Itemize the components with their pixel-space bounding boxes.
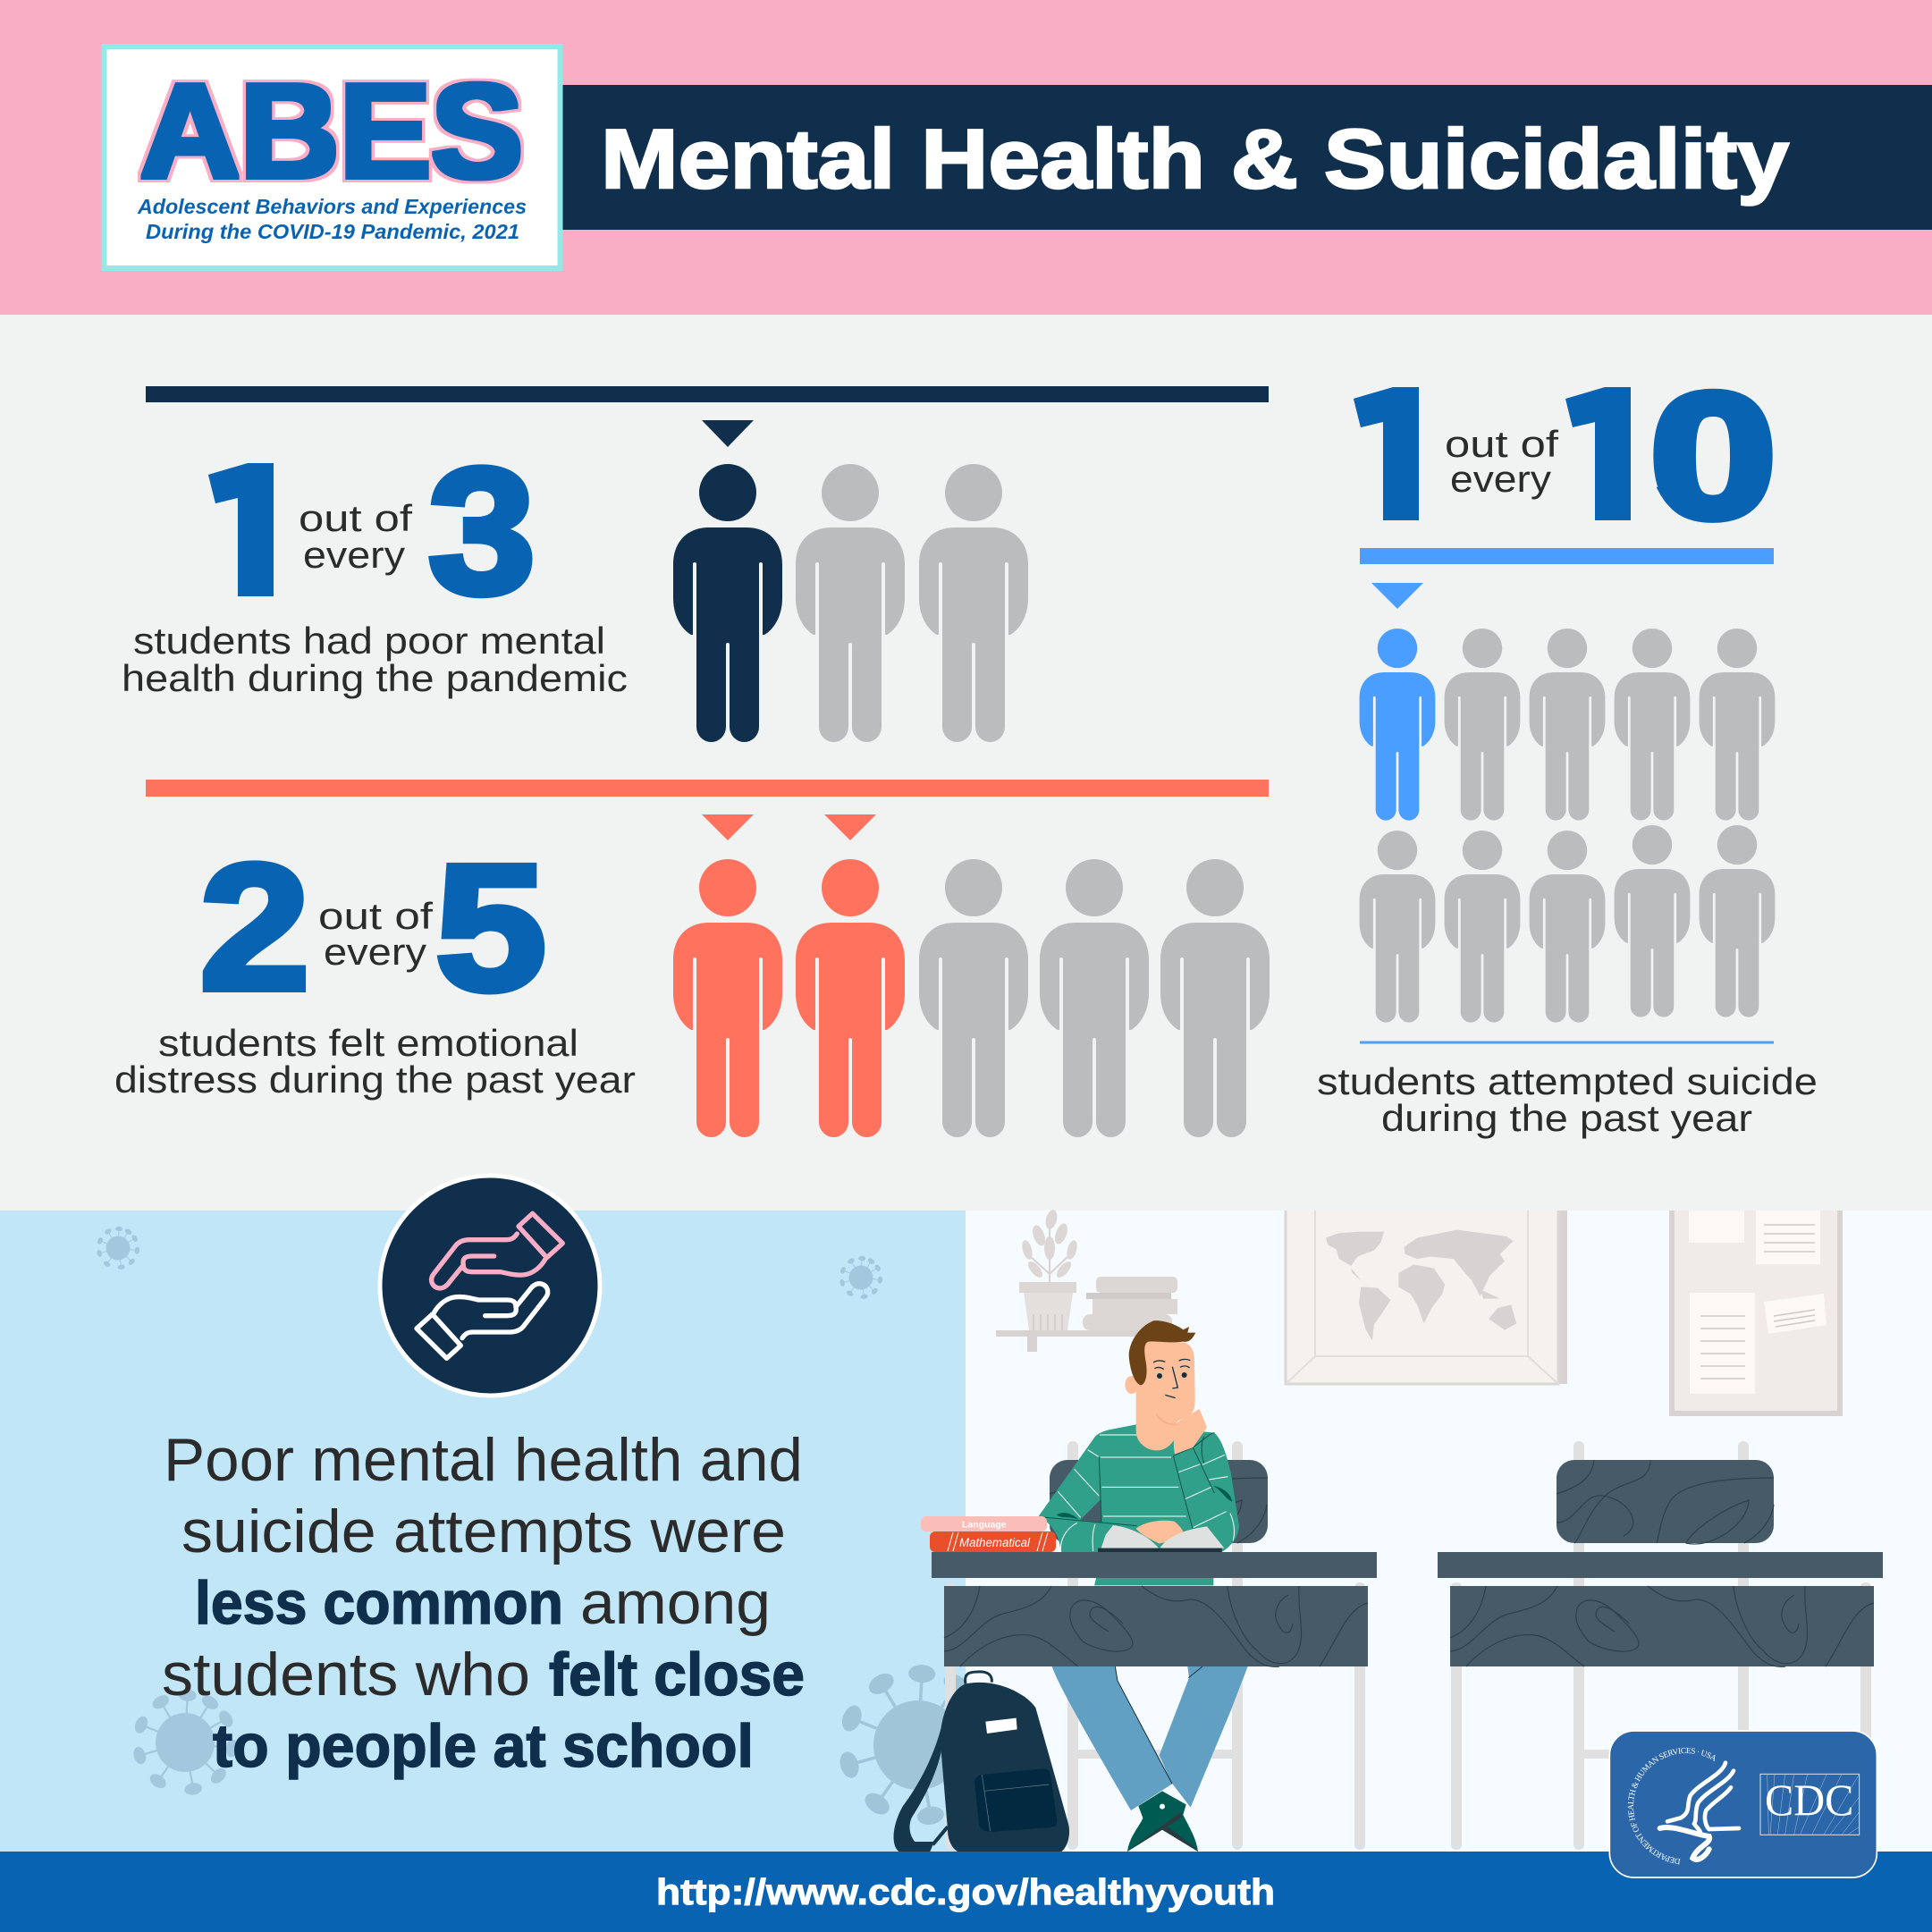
statistic: 2 out of every 5: 2 bbox=[200, 828, 309, 1027]
hair bbox=[1129, 1320, 1195, 1385]
message text: Poor mental health and bbox=[164, 1426, 803, 1494]
caption: emotional distress: distress during the past year bbox=[114, 1059, 636, 1101]
open book bbox=[1101, 1525, 1224, 1548]
student legs and shoes bbox=[1052, 1666, 1248, 1852]
panel: classroom illustration bbox=[894, 1209, 1932, 1853]
caption: suicide attempts bbox=[1317, 1060, 1818, 1139]
footer bar with URL: http://www.cdc.gov/healthyyouth bbox=[656, 1871, 1275, 1912]
wall map bbox=[1286, 1211, 1567, 1384]
ABES logo: ABES bbox=[140, 55, 523, 206]
statistic: 1 out of every 3 bbox=[208, 463, 533, 599]
message text: students who bbox=[162, 1641, 530, 1708]
logo subtitle: During the COVID-19 Pandemic, 2021 bbox=[146, 220, 519, 243]
pictogram: 1 of 3 people bbox=[673, 420, 1028, 742]
CDC logo: CDC bbox=[1765, 1776, 1853, 1825]
statistic: 1 out of every 3: out of bbox=[299, 497, 412, 539]
chairs and desk legs bbox=[945, 1441, 1871, 1850]
statistic: 1 out of every 3: every bbox=[303, 534, 405, 576]
desk left bbox=[932, 1552, 1377, 1666]
logo subtitle bbox=[137, 195, 527, 243]
pictogram: 1 of 10 people bbox=[1360, 583, 1775, 1023]
desk right bbox=[1438, 1552, 1883, 1666]
title bar: Mental Health & Suicidality bbox=[562, 85, 1932, 230]
face bbox=[1153, 1359, 1190, 1398]
caption: poor mental health: students had poor mental bbox=[133, 620, 605, 662]
hand on book bbox=[1136, 1521, 1184, 1544]
statistic: 1 out of every 10: 10 bbox=[1532, 358, 1767, 555]
panel: 1 out of 10 suicide attempts bbox=[1318, 387, 1816, 1139]
shirt bbox=[1039, 1424, 1239, 1552]
caption: emotional distress: students felt emotional bbox=[158, 1022, 578, 1064]
statistic: 1 out of every 10: 1 bbox=[1270, 353, 1474, 558]
chair backrests bbox=[1050, 1460, 1774, 1544]
caption: poor mental health: health during the pandemic bbox=[122, 657, 628, 699]
statistic: 1 out of every 10: out of bbox=[1445, 423, 1558, 465]
caption: suicide attempts: during the past year bbox=[1381, 1097, 1752, 1139]
head and neck bbox=[1136, 1341, 1195, 1450]
textbooks bbox=[921, 1516, 1056, 1552]
caption: emotional distress bbox=[114, 1022, 636, 1101]
panel: 2 out of 5 emotional distress bbox=[114, 780, 1270, 1137]
ABES logo bbox=[104, 46, 560, 268]
notice board bbox=[1669, 1211, 1843, 1416]
message text: felt close bbox=[549, 1641, 805, 1708]
statistic: 1 out of every 10: every bbox=[1450, 458, 1551, 500]
panel: 1 out of 3 poor mental health bbox=[122, 386, 1269, 742]
backpack bbox=[894, 1672, 1069, 1853]
statistic: 2 out of every 5: out of bbox=[318, 895, 433, 937]
hand on chin bbox=[1174, 1409, 1207, 1455]
virus decoration bbox=[97, 1227, 1000, 1827]
statistic: 2 out of every 5: every bbox=[324, 931, 426, 973]
pictogram: 2 of 5 people bbox=[673, 814, 1270, 1137]
header banner bbox=[0, 0, 1932, 315]
message text: suicide attempts were bbox=[181, 1498, 786, 1565]
statistic: 1 out of every 3: 1 bbox=[125, 429, 329, 633]
shelf with plant and books bbox=[996, 1209, 1177, 1352]
statistic: 1 out of every 10 bbox=[1354, 387, 1773, 523]
HHS eagle bbox=[1660, 1763, 1739, 1860]
HHS circular text: DEPARTMENT OF HEALTH & HUMAN SERVICES · USA bbox=[1627, 1747, 1715, 1865]
statistic: 2 out of every 5 bbox=[200, 828, 546, 1028]
message text: among bbox=[580, 1569, 771, 1637]
statistic: 1 out of every 3: 3 bbox=[428, 432, 536, 631]
icon: caring hands bbox=[380, 1176, 600, 1396]
panel: light blue message bbox=[0, 1176, 1000, 1852]
logo subtitle: Adolescent Behaviors and Experiences bbox=[137, 195, 527, 218]
HHS and CDC logo badge bbox=[1609, 1730, 1877, 1878]
caption: poor mental health bbox=[122, 620, 628, 699]
message text bbox=[162, 1426, 805, 1780]
student bbox=[1039, 1320, 1239, 1585]
statistic: 2 out of every 5: 5 bbox=[435, 828, 546, 1028]
message text: less common bbox=[195, 1569, 563, 1637]
caption: suicide attempts: students attempted suicide bbox=[1317, 1060, 1818, 1102]
textbooks: Mathematical bbox=[959, 1535, 1031, 1549]
message text: to people at school bbox=[213, 1712, 754, 1780]
textbooks: Language bbox=[962, 1520, 1007, 1531]
footer bar with URL bbox=[0, 1852, 1932, 1932]
title bar: Mental Health & Suicidality: Mental Health & Suicidality bbox=[601, 112, 1789, 206]
